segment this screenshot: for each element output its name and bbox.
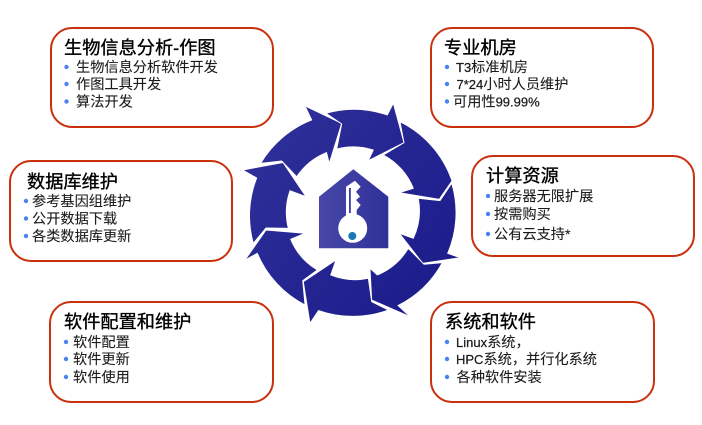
heading: bioinformatics: 生物信息分析-作图 [64, 38, 216, 58]
list: bioinformatics items: 生物信息分析软件开发 [76, 59, 218, 76]
list: data centre items: T3标准机房 [456, 60, 528, 76]
list: bioinformatics items: 算法开发 [76, 94, 133, 110]
heading: software configuration: 软件配置和维护 [64, 312, 191, 332]
list: data centre items: 可用性99.99% [453, 94, 540, 110]
icon: key [338, 181, 367, 243]
list: data centre items: 7*24小时人员维护 [456, 77, 568, 93]
list: software configuration items: 软件更新 [73, 352, 130, 368]
panel: systems and software [431, 302, 654, 402]
arrow: lower right [370, 248, 442, 317]
heading: database maintenance: 数据库维护 [27, 172, 118, 192]
list: bioinformatics items [64, 59, 218, 110]
list: compute items: 按需购买 [494, 207, 551, 223]
panel: software configuration [50, 302, 273, 402]
list: bioinformatics items: 作图工具开发 [76, 77, 161, 93]
list: systems items [445, 335, 597, 386]
list: systems items: 各种软件安装 [456, 370, 542, 386]
icon: house with key [319, 169, 388, 248]
arrow: right [399, 183, 460, 263]
list: software configuration items: 软件使用 [73, 369, 130, 386]
cycle diagram: ring of eight arrows with key house [243, 103, 461, 323]
list: compute items: 公有云支持* [494, 227, 571, 243]
list: database items: 公开数据下载 [32, 212, 117, 228]
arrow: bottom [303, 260, 388, 323]
arrow: left [243, 162, 306, 243]
list: software configuration items: 软件配置 [73, 335, 130, 351]
heading: data centre: 专业机房 [444, 38, 517, 58]
arrow: lower left [245, 230, 317, 305]
list: systems items: HPC系统，并行化系统 [456, 352, 597, 368]
list: compute items [486, 189, 593, 243]
list: systems items: Linux系统， [456, 335, 530, 351]
heading: systems and software: 系统和软件 [445, 312, 536, 332]
arrow: top [326, 103, 404, 161]
list: data centre items [445, 60, 568, 110]
panel: compute resources [472, 156, 694, 256]
heading: compute resources: 计算资源 [486, 166, 559, 186]
panel: database maintenance [10, 161, 232, 261]
list: database items: 各类数据库更新 [32, 229, 131, 245]
panel: data centre [431, 28, 653, 127]
panel: bioinformatics [51, 28, 273, 127]
arrow: upper right [383, 122, 461, 199]
list: database items [24, 193, 131, 245]
list: software configuration items [64, 335, 130, 386]
arrow: upper left [261, 106, 342, 177]
list: compute items: 服务器无限扩展 [494, 189, 593, 205]
list: database items: 参考基因组维护 [32, 193, 131, 210]
